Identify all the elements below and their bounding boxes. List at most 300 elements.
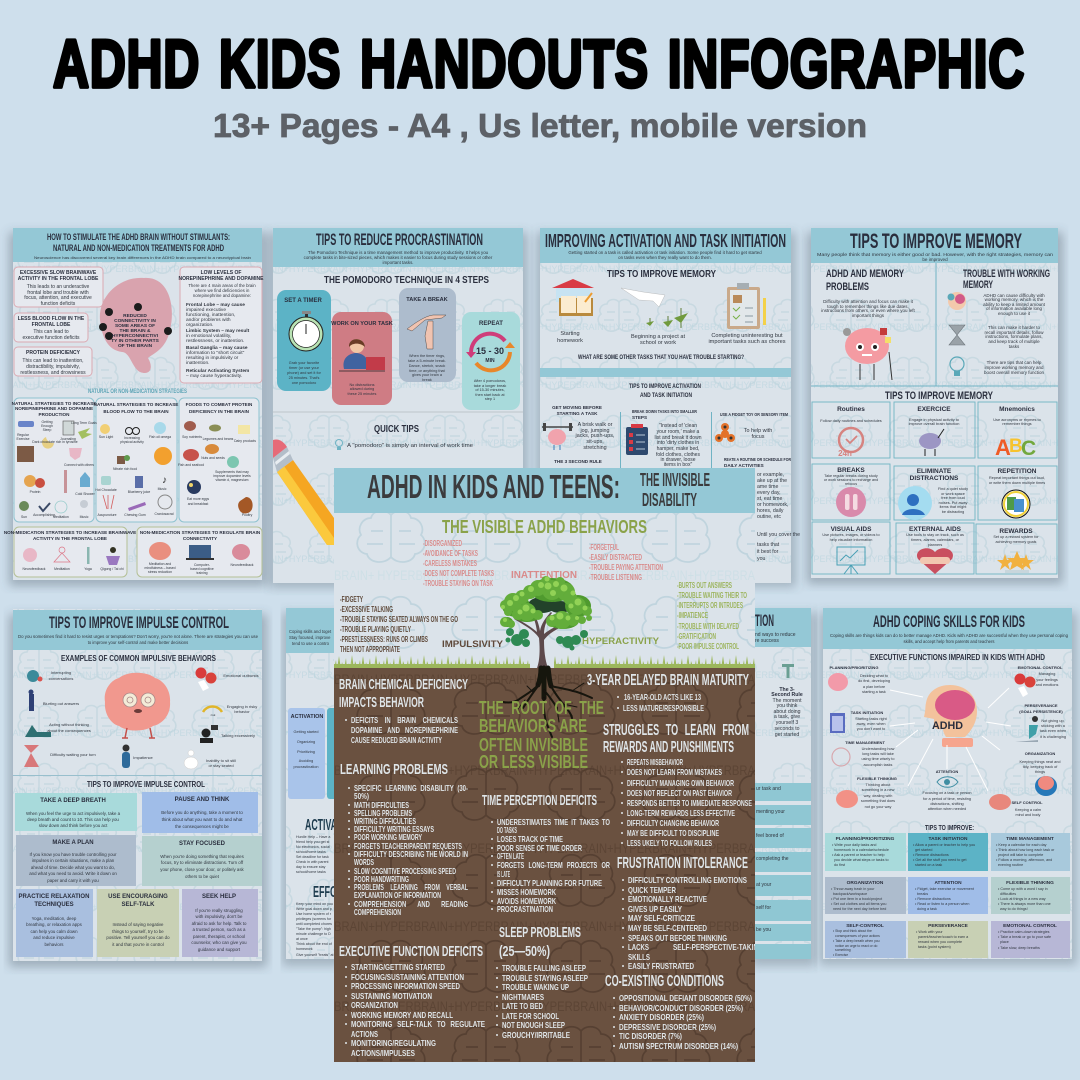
section: frustration intolerance: DIFFICULTY CONTROLLING EMOTIONS — [628, 875, 747, 885]
tip: external aids: planners — [928, 543, 942, 547]
section: co-existing conditions: TIC DISORDER (7%) — [619, 1031, 682, 1041]
tip: breaks: BREAKS — [837, 467, 865, 474]
item: emotional control — [1014, 665, 1063, 697]
card: seek help: afraid to ask for help. Talk to — [192, 921, 247, 926]
heading — [830, 612, 1069, 644]
section: learning problems: EXPLANATION OF INFORMATION — [354, 890, 441, 900]
item: task initiation — [830, 710, 888, 733]
section: rewards and punishments: REWARDS AND PUNSHIMENTS — [603, 739, 734, 756]
card: emotional control tips: • Take slow, deep breaths — [998, 946, 1040, 950]
list: bands: at your — [756, 882, 772, 888]
callout: less blood flow: executive function deficits — [23, 335, 80, 341]
watermark rows: BRAIN+HYPERBRAIN+HYPERBRAIN+HYPERBRAIN+HYPERBRAIN+HYPERBRA — [334, 762, 756, 778]
section: time perception: MISSES HOMEWORK — [497, 887, 557, 897]
list: hyperactivity: -TROUBLE WAITING THEIR TO — [677, 591, 747, 600]
heading: pomodoro: THE POMODORO TECHNIQUE IN 4 STEPS — [324, 275, 489, 286]
section: frustration intolerance: MAY BE SELF-CENTERED — [628, 923, 707, 933]
heading: TIPS TO IMPROVE IMPULSE CONTROL — [49, 613, 229, 632]
section: ADHD and memory: tough to remember things like due dates, — [827, 304, 909, 309]
card: organization tips: • Put one item in a book/project — [831, 897, 882, 901]
list: impulsive behaviors left: about the consequences — [47, 728, 91, 733]
watermark rows — [334, 567, 756, 1014]
card: take a break — [399, 288, 456, 382]
card: task initiation tips: • Allow a parent or teacher to help you — [913, 843, 975, 847]
card: self-talk: SELF-TALK — [122, 902, 155, 908]
column: fidget: USE A FIDGET TOY OR SENSORY ITEM — [720, 412, 788, 417]
list: impulsive behaviors center: Impatience — [133, 755, 154, 760]
heading: The Pomodoro Technique is a time management method to improve productivity. It helps you — [308, 250, 489, 255]
callout: slow brainwave: ACTIVITY IN THE FRONTAL LOBE — [18, 276, 99, 282]
card: time management tips: • Keep a calendar for each day — [996, 843, 1047, 847]
label: hyperactivity: HYPERACTIVITY — [582, 636, 660, 647]
panel: strategies columns: FOODS TO COMBAT PROTEIN — [186, 402, 253, 407]
card: task initiation tips: • Get all the stuff you need to get — [913, 858, 966, 862]
heading: IMPROVING ACTIVATION AND TASK INITIATION — [545, 231, 786, 251]
heading: root of behaviors: THE ROOT OF THE — [479, 698, 604, 718]
panel: handout stimulate the ADHD brain — [4, 228, 267, 586]
tip: breaks: Take regular breaks during study — [824, 474, 878, 478]
section: working memory: of information available long — [986, 306, 1043, 311]
card: activation list: Prioritizing — [297, 750, 315, 754]
panel: non-medication bottom right: training — [196, 571, 208, 575]
labels: column two: Chewing Gum — [124, 513, 146, 517]
section: executive function deficits: EXECUTIVE FUNCTION DEFICITS — [339, 943, 483, 960]
labels: column three: and breakfast — [188, 502, 208, 506]
callout: low levels: Reticular Activating System — [186, 368, 249, 374]
section: working memory: This can make it harder to — [988, 325, 1041, 330]
heading remains: TION — [755, 611, 774, 630]
card: make a plan: paper and carry it with you — [47, 878, 99, 883]
card: seek help — [182, 889, 258, 957]
labels: column two: Music — [158, 487, 167, 491]
section: activation: school/home tasks — [296, 850, 326, 854]
section: learning problems — [340, 761, 468, 917]
heading remains: re success — [755, 638, 779, 644]
tip: mnemonics: remember things — [1002, 421, 1032, 426]
card: take a break: take a 5-minute break. — [408, 359, 446, 363]
question: WHAT ARE SOME OTHER TASKS THAT YOU HAVE TROUBLE STARTING? — [578, 355, 744, 361]
item: attention: attention when needed — [928, 807, 966, 811]
tip: eliminate distractions: items that might — [940, 505, 967, 509]
panel: non-medication bottom right: mindfulness – based — [144, 566, 176, 570]
section: sleep problems: (25—50%) — [499, 943, 550, 960]
arrows from head — [890, 688, 1011, 791]
callout: low levels: NOREPINEPHRINE AND DOPAMINE — [178, 276, 264, 282]
item: organization: things — [1035, 770, 1045, 774]
section: frustration intolerance: MAY SELF-CRITICIZE — [628, 913, 695, 923]
tip: eliminate distractions: Find a quiet study — [938, 487, 968, 491]
card: task initiation tips — [908, 833, 988, 871]
card: emotional control tips: EMOTIONAL CONTROL — [1003, 923, 1057, 929]
card: planning tips: PLANNING/PRIORITIZING — [836, 836, 895, 842]
card: make a plan: ahead of time. Decide what you want to do, — [31, 865, 115, 870]
callout: low levels: information to "short circuit" — [186, 350, 245, 356]
callout: low levels: resulting in impulsivity or — [186, 355, 239, 361]
panel: strategies columns: DEFICIENCY IN THE BRAIN — [189, 409, 250, 414]
tip: repetition: Repeat important things out loud, — [989, 476, 1045, 480]
icons: column three — [183, 421, 253, 513]
card: relaxation: behaviors — [44, 942, 64, 947]
text: three second rule: The moment — [772, 698, 802, 704]
section: frustration intolerance: FRUSTRATION INTOLERANCE — [617, 855, 748, 872]
card: stay focused — [142, 836, 262, 886]
card: take a break: time, or anything that — [409, 369, 446, 373]
card: emotional control tips: • Take a break or go to your safe — [998, 935, 1051, 939]
labels: column one: Meditation — [53, 515, 69, 519]
item: time management: accomplish tasks — [864, 763, 893, 767]
column: break down tasks: list and break it down — [655, 435, 702, 441]
text: right side remains: ame time — [757, 484, 778, 490]
section: ADHD and memory: Difficulty with attention and focus can make it — [823, 299, 914, 304]
card: take a break: When the timer rings, — [409, 354, 445, 358]
text: right side remains: you — [757, 556, 765, 562]
card: stay focused: When you're doing something that requires — [160, 854, 245, 859]
section: effort: minute challenge to D — [296, 932, 331, 936]
tip: rewards: REWARDS — [999, 528, 1033, 535]
section: rewards and punishments: MAY BE DIFFICULT TO DISCIPLINE — [627, 828, 719, 838]
canopy foliage — [501, 578, 591, 629]
section: rewards and punishments: DIFFICULTY CHANGING BEHAVIOR — [627, 818, 719, 828]
card: deep breath: TAKE A DEEP BREATH — [40, 798, 106, 804]
tip: mnemonics: Use acronyms or rhymes to — [993, 417, 1041, 422]
section: activation: No electronics, social — [296, 845, 330, 849]
section: rewards and punishments: LONG-TERM REWARDS LESS EFFECTIVE — [627, 808, 735, 818]
card: relaxation: and reduce impulsive — [33, 935, 75, 940]
heading: tips: TIPS TO IMPROVE MEMORY — [607, 268, 716, 280]
card: self-talk: things to yourself, try to be — [112, 929, 164, 934]
label: inattention: INATTENTION — [511, 570, 577, 581]
list: bands: ur task and — [756, 786, 781, 792]
column: get moving: A brisk walk or — [578, 422, 613, 428]
callout: low levels: in emotional volatility, — [186, 333, 231, 339]
panel: handout impulse control — [9, 609, 267, 967]
tip: repetition: or write them down multiple times — [989, 481, 1045, 485]
section: working memory: ADHD can cause difficulty with — [983, 293, 1045, 298]
section: delayed brain maturity: 16-YEAR-OLD ACTS LIKE 13 — [624, 692, 701, 702]
card: flexible thinking tips: • Look at things in a new way — [998, 897, 1046, 901]
card: organization tips: ORGANIZATION — [847, 880, 884, 886]
item: emotional control: your feelings — [1036, 678, 1058, 682]
heading: Do you sometimes find it hard to resist urges or temptations? Don't worry, you're not alone. There are strategies you can use — [18, 634, 259, 639]
card: set a timer: SET A TIMER — [284, 298, 322, 304]
labels: task examples — [557, 331, 786, 346]
icon: central brain: OF THE BRAIN — [118, 343, 153, 349]
icon: T shape — [782, 664, 794, 678]
icon: central brain: SOME AREAS OF — [115, 323, 155, 329]
item: task initiation: away, even when — [856, 722, 886, 726]
tip: routines — [820, 406, 882, 458]
card: perseverance tips: reward when you complete — [918, 940, 962, 944]
watermark rows: BRAIN+HYPERBRAIN+HYPERBRAIN+HYPERBRAIN+HYPERBRAIN+HYPERBRA — [334, 671, 756, 687]
heading: tips to improve: TIPS TO IMPROVE: — [925, 823, 974, 832]
card: seek help: SEEK HELP — [202, 894, 236, 900]
column: break down tasks: into 'dirty clothes in — [657, 440, 699, 446]
section: ADHD and memory — [821, 268, 916, 380]
labels: column three: Poultry — [242, 513, 253, 517]
card: pause and think: think about what you want to do and what — [162, 817, 243, 822]
callout: protein deficiency: PROTEIN DEFICIENCY — [26, 350, 81, 356]
card: time management tips: • Follow a morning, afternoon, and — [996, 858, 1052, 862]
text: three second rule: The 3- — [779, 687, 795, 693]
card: make a plan: If you know you have trouble controlling your — [30, 852, 117, 857]
callout: slow brainwave: frontal lobe and trouble with — [27, 290, 89, 296]
labels: column three: Legumes and beans — [203, 437, 234, 441]
section: learning problems: DIFFICULTY DESCRIBING THE WORLD IN — [354, 849, 468, 859]
section: working memory: MEMORY — [963, 279, 993, 291]
section: sleep problems: LATE FOR SCHOOL — [502, 1011, 559, 1021]
card: relaxation: TECHNIQUES — [34, 902, 74, 908]
column: fidget: To help with — [744, 428, 772, 434]
section: brain chemical deficiency: DOPAMINE AND NOREPINEPHRINE — [351, 725, 458, 735]
heading: tips grid: TIPS TO IMPROVE MEMORY — [885, 390, 993, 402]
card: self-talk: Instead of saying negative — [112, 922, 164, 927]
callout: slow brainwave: This leads to an underactive — [27, 284, 89, 290]
item: planning: a plan before — [863, 685, 885, 689]
card: repeat: step 1 — [485, 397, 495, 401]
card: self-control tips: consequences of your actions — [835, 934, 880, 938]
card: task initiation tips: • Remove distractions — [913, 853, 949, 857]
section: co-existing conditions — [605, 973, 752, 1051]
section: effort: "Take the pump": high — [296, 927, 331, 931]
card: work on your task: allowed during — [350, 387, 374, 391]
icon: ADHD head: ADHD — [932, 720, 963, 732]
labels: column two: Nitrate rich food — [113, 467, 137, 471]
card: organization tips: • Throw away trash in your — [831, 887, 875, 891]
item: attention: Focusing on a task or person — [923, 791, 971, 795]
tip: mnemonics: A — [995, 435, 1011, 460]
watermark rows: BRAIN+HYPERBRAIN+HYPERBRAIN+HYPERBRAIN+HYPERBRAIN+HYPERBRA — [334, 998, 756, 1014]
column: get moving: stretching — [583, 445, 607, 451]
item: task initiation: you don't want to — [857, 727, 885, 731]
card: perseverance tips: tasks (point system) — [918, 945, 951, 949]
tip: rewards: Set up a reward system for — [993, 535, 1039, 539]
column: get moving: STARTING A TASK — [557, 411, 598, 416]
card: task initiation tips: TASK INITIATION — [928, 836, 968, 842]
section: rewards and punishments: LESS UKELY TO FOLLOW RULES — [627, 838, 712, 848]
card: attention tips: ATTENTION — [934, 880, 962, 886]
card: planning tips — [825, 833, 906, 871]
item: organization: Keeping things neat and — [1020, 760, 1060, 764]
section: executive function deficits: WORKING MEMORY AND RECALL — [351, 1010, 453, 1020]
callout: low levels: and/or problems with — [186, 317, 231, 323]
panel: hidden handout right — [745, 608, 816, 966]
list: inattention right: -FORGETFUL — [589, 543, 619, 552]
tip: eliminate distractions: DISTRACTIONS — [910, 475, 959, 482]
section: working memory: and keep track of multiple — [988, 339, 1040, 344]
card: deep breath — [15, 793, 137, 831]
card: emotional control tips — [991, 921, 1070, 958]
section: delayed brain maturity: 3-YEAR DELAYED BRAIN MATURITY — [587, 672, 749, 689]
item: flexible thinking: not go your way — [865, 805, 891, 809]
card: repeat: After 4 pomodoros, — [474, 379, 506, 383]
text: three second rule: yourself 3 — [776, 720, 798, 726]
card: attention tips: • Read or listen to a person when — [915, 902, 969, 906]
labels: column three: Soy nutrients — [182, 435, 202, 439]
section: learning problems: FORGETS TEACHER/PARENT REQUESTS — [354, 841, 462, 851]
column: break down tasks: items in box" — [664, 462, 692, 468]
section: effort: Keep your mind on you — [296, 902, 333, 906]
card: emotional control tips: place — [1000, 940, 1009, 944]
list: impulsive behaviors left: Blurting out answers — [43, 701, 79, 706]
section: activation — [296, 817, 337, 874]
heading: poster title: ADHD IN KIDS AND TEENS: — [367, 468, 620, 505]
card: self-control tips: • Stop and think about the — [833, 929, 872, 933]
text: right side remains: tasks that — [757, 542, 780, 548]
list: inattention right: -EASILY DISTRACTED — [589, 553, 642, 562]
list: hyperactivity: -POOR IMPULSE CONTROL — [677, 642, 739, 651]
section: activation: Check in with parent — [296, 860, 329, 864]
tip: eliminate distractions: noises. Put away — [939, 501, 967, 505]
section: time perception: PROCRASTINATION — [497, 904, 553, 914]
card: set a timer: Grab your favorite — [289, 361, 319, 365]
section: frustration intolerance: EMOTIONALLY REACTIVE — [628, 894, 707, 904]
card: repeat: then start back at — [475, 393, 506, 397]
panel: handout procrastination — [269, 228, 528, 588]
watermark rows: BRAIN+HYPERBRAIN+HYPERBRAIN+HYPERBRAIN+HYPERBRAIN+HYPERBRA — [334, 918, 756, 934]
panel: non-medication bottom right: based cognitive — [190, 567, 214, 571]
card: make a plan: and what you need to avoid. Write it down on — [29, 871, 117, 876]
tip: rewards: achieving memory goals — [996, 540, 1037, 544]
card: activation list: Organizing — [297, 740, 315, 744]
callout: protein deficiency: This can lead to inattention, — [22, 358, 84, 364]
card: time management tips: • Think about how long each task or — [996, 848, 1055, 852]
icon: central brain: TY IN OTHER PARTS — [111, 338, 160, 344]
header text: Stay focused, improve — [289, 635, 331, 640]
section: learning problems: POOR HANDWRITING — [354, 874, 409, 884]
icons: column two — [100, 422, 172, 511]
watermark rows: BRAIN+HYPERBRAIN+HYPERBRAIN+HYPERBRAIN+HYPERBRAIN+HYPERBRA — [334, 840, 756, 856]
list: impulsive behaviors right: Emotional outbursts — [223, 673, 259, 678]
card: pause and think: Before you do anything, take a moment to — [161, 810, 243, 815]
icon: homework book — [552, 279, 594, 316]
item: planning — [828, 665, 890, 694]
labels: task examples: Beginning a project at — [631, 334, 685, 340]
item: flexible thinking: way, dealing with — [864, 794, 892, 798]
section: time perception: OFTEN LATE — [497, 851, 524, 861]
card: activation list: procrastination — [294, 765, 318, 769]
card: stay focused: focus, try to eliminate distractions. Turn off — [161, 860, 244, 865]
card: relaxation: can help you calm down — [30, 929, 78, 934]
labels: column one — [16, 420, 97, 519]
card: attention tips: breaks — [917, 892, 928, 896]
card: time management tips: project will take to complete — [998, 853, 1043, 857]
item: task initiation: Starting tasks right — [855, 717, 888, 721]
heading: Getting started on a task is called activation or task initiation. Some people find it hard to get started — [568, 250, 762, 255]
label: impulsivity: IMPULSIVITY — [442, 639, 504, 650]
section: working memory: tasks — [1009, 344, 1020, 349]
heading: tips activation: AND TASK INITIATION — [640, 392, 692, 399]
panel: non-medication bottom left: ACTIVITY IN THE FRONTAL LOBE — [33, 536, 107, 541]
list: inattention left: -TROUBLE STAYING ON TASK — [423, 579, 493, 588]
item: flexible thinking — [836, 776, 897, 809]
text: three second rule — [771, 687, 803, 738]
tip: exercise — [909, 406, 959, 456]
section: frustration intolerance — [617, 855, 763, 971]
labels: task examples: Starting — [560, 331, 580, 337]
section: learning problems: WORDS — [354, 857, 374, 867]
section: time perception: IS LATE — [497, 869, 510, 879]
section: time perception: FORGETS LONG-TERM PROJECTS OR — [497, 860, 610, 870]
list: impulsive behaviors left: conversations — [49, 676, 73, 681]
card: organization tips: • Set out clothes and all items you — [831, 902, 886, 906]
item: perseverance: Not giving up, — [1041, 719, 1065, 723]
text: three second rule: you think — [777, 703, 798, 709]
card: activation list: Getting started — [294, 730, 318, 734]
column: break down tasks: in drawer, loose — [660, 457, 696, 463]
column: fidget — [715, 412, 792, 468]
card: make a plan: MAKE A PLAN — [52, 840, 94, 846]
column: fidget: DAILY ACTIVITIES — [724, 463, 764, 468]
section: ADHD and memory: instructions from others, or even where you left — [821, 308, 916, 313]
icon: dizzy brain — [105, 673, 170, 738]
card: emotional control tips: • Practice calm-down strategies — [998, 930, 1050, 934]
panel: non-medication bottom right — [137, 527, 262, 577]
section: rewards and punishments: DOES NOT REFLECT ON PAST EHAVIOR — [627, 788, 732, 798]
panel: non-medication bottom left — [4, 527, 136, 577]
list: impulsivity — [340, 595, 458, 654]
card: activation list — [288, 708, 347, 799]
column: break down tasks: fold clothes, clothes — [656, 452, 700, 458]
card: take a break: TAKE A BREAK — [406, 297, 448, 303]
section: activation: friend help you get st — [296, 840, 329, 844]
heading: root of behaviors: BEHAVIORS ARE — [479, 716, 587, 736]
list: bands: be you — [756, 927, 771, 933]
panel: non-medication bottom right: NON-MEDICATION STRATEGIES TO REGULATE BRAIN — [140, 530, 261, 535]
labels: column three: vitamin d, magnesium — [216, 478, 249, 482]
card: planning tips: • Ask a parent or teacher to help — [832, 853, 885, 857]
column: break down tasks: BREAK DOWN TASKS INTO SMALLER — [632, 409, 698, 414]
item: time management: Understanding how — [862, 747, 895, 751]
list: impulsivity: -FIDGETY — [340, 595, 363, 604]
tip: external aids: Use tools to stay on track, such as — [906, 533, 964, 537]
tip: breaks — [824, 467, 878, 517]
card: repeat: 15 - 30 — [476, 346, 504, 356]
card: take a break: Dance, stretch, snack — [409, 364, 445, 368]
card: deep breath: slow down and think before you act — [39, 823, 108, 828]
tip: repetition — [989, 468, 1045, 518]
card: relaxation: breathing, or relaxation apps — [26, 922, 83, 927]
panel: handout memory — [807, 228, 1063, 584]
trunk and branches — [514, 612, 558, 668]
card: perseverance tips: • Work with your — [916, 930, 943, 934]
heading: natural strategies: NATURAL OR NON-MEDICATION STRATEGIES — [88, 388, 187, 395]
section: learning problems: COMPREHENSION — [354, 907, 401, 917]
text: right side remains: or example, — [757, 472, 784, 478]
section: learning problems: SPELLING PROBLEMS — [354, 808, 412, 818]
item: self control: SELF CONTROL — [1011, 800, 1043, 805]
section: rewards and punishments — [603, 722, 752, 848]
section: learning problems: PROBLEMS LEARNING FROM VERBAL — [354, 882, 468, 892]
panel: handout activation — [536, 228, 800, 587]
watermark rows: BRAIN+ HYPERBRAIN+HYPERBRAIN+HYPERBRAIN+ HYPERBRAIN+HYPERBRA — [334, 567, 756, 583]
item: perseverance — [1015, 703, 1066, 742]
item: self control: Keeping a calm — [1015, 808, 1041, 812]
list: impulsive behaviors center: Inability to sit still — [206, 758, 236, 763]
heading: HOW TO STIMULATE THE ADHD BRAIN WITHOUT STIMULANTS: — [47, 232, 230, 243]
section: sleep problems: TROUBLE FALLING ASLEEP — [502, 963, 586, 973]
section: executive function deficits: MONITORING SELF-TALK TO REGULATE — [351, 1019, 485, 1029]
list: impulsive behaviors left: Difficulty waiting your turn — [50, 752, 96, 757]
panel: hidden handout left — [282, 608, 347, 966]
labels: column one: Connect with others — [64, 463, 94, 467]
card: activation list: Avoiding — [299, 759, 313, 763]
card: self-control tips: SELF-CONTROL — [846, 923, 884, 929]
card: work on your task: No distractions — [349, 383, 375, 387]
card: self-control tips: • Exercise — [833, 953, 848, 957]
section: executive function deficits — [339, 943, 485, 1058]
section: activation: day to ensure stay — [296, 865, 326, 869]
card: seek help: with impulsivity, don't be — [196, 914, 243, 919]
